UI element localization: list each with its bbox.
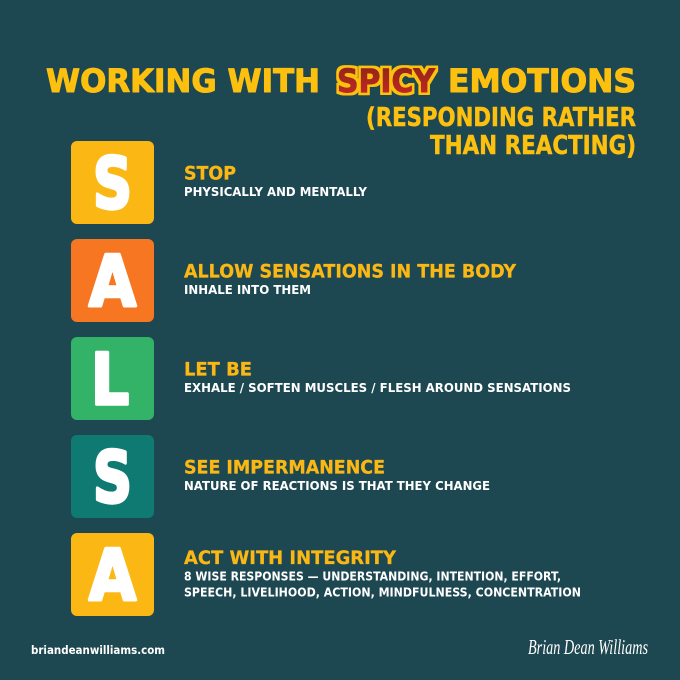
- step: L let be: [71, 337, 571, 421]
- title: [46, 62, 636, 100]
- step: L let be: L: [91, 339, 129, 421]
- subtitle: THAN REACTING): [430, 131, 636, 161]
- step: A allow: A: [89, 241, 136, 323]
- spicy word: SPICY: [337, 62, 436, 100]
- title: EMOTIONS: [448, 62, 636, 100]
- step: S see impermanence: S: [93, 437, 132, 519]
- step: L let be: LET BE: [184, 358, 252, 380]
- website: briandeanwilliams.com: [31, 643, 165, 657]
- step: A allow: [71, 239, 516, 323]
- step: A act with integrity: 8 WISE RESPONSES — UNDERSTANDING, INTENTION, EFFORT,: [184, 568, 561, 584]
- step: A act with integrity: [71, 533, 581, 617]
- step: S see impermanence: SEE IMPERMANENCE: [184, 456, 385, 478]
- step: A act with integrity: SPEECH, LIVELIHOOD, ACTION, MINDFULNESS, CONCENTRATION: [184, 584, 581, 600]
- step: S see impermanence: NATURE OF REACTIONS IS THAT THEY CHANGE: [184, 478, 490, 493]
- step: S stop: S: [93, 143, 132, 225]
- step: A allow: ALLOW SENSATIONS IN THE BODY: [184, 260, 516, 282]
- step: A allow: INHALE INTO THEM: [184, 282, 311, 297]
- step: A act with integrity: ACT WITH INTEGRITY: [184, 547, 396, 569]
- step: S stop: PHYSICALLY AND MENTALLY: [184, 184, 368, 199]
- title: WORKING WITH: [46, 62, 320, 100]
- step: L let be: EXHALE / SOFTEN MUSCLES / FLESH AROUND SENSATIONS: [184, 380, 571, 395]
- subtitle: [366, 103, 636, 161]
- step: S stop: STOP: [184, 162, 236, 184]
- step: S stop: [71, 141, 368, 225]
- step: S see impermanence: [71, 435, 490, 519]
- step: A act with integrity: A: [89, 535, 136, 617]
